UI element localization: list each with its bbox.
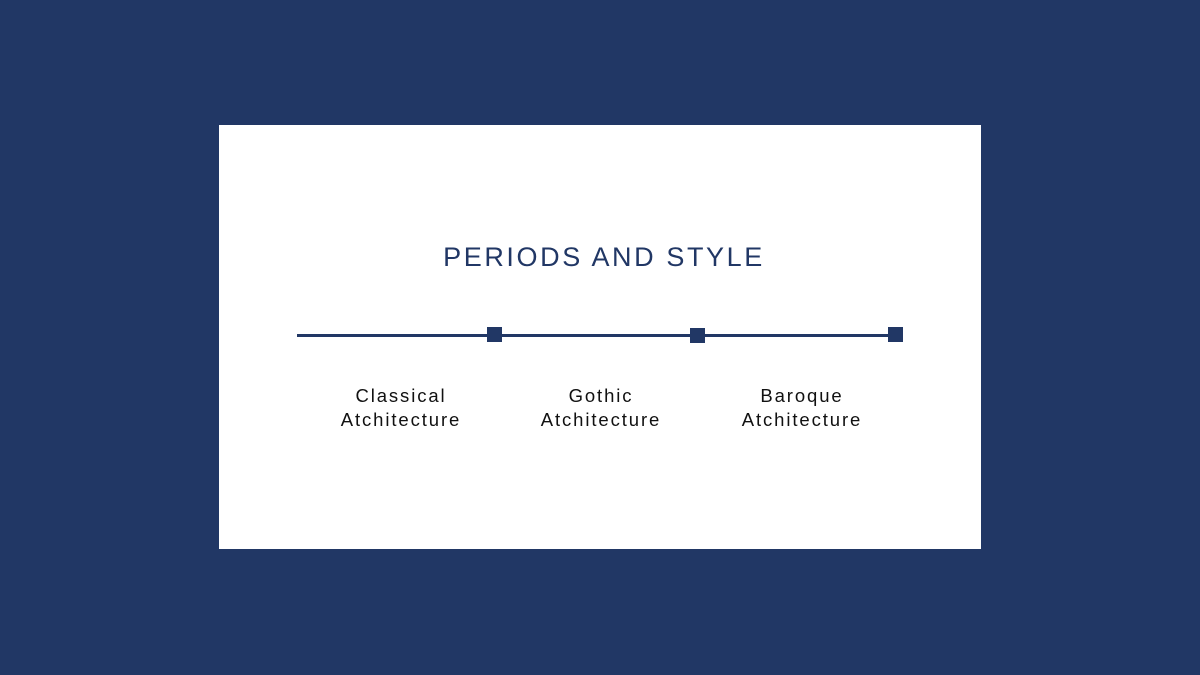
- label: classical: Classical: [355, 385, 447, 406]
- label: classical: [340, 385, 461, 430]
- label: gothic: Atchitecture: [541, 409, 661, 430]
- label: baroque: [742, 385, 862, 430]
- label: classical: Atchitecture: [341, 409, 461, 430]
- marker 3: [888, 327, 903, 342]
- label: baroque: Baroque: [760, 385, 844, 406]
- title: PERIODS AND STYLE: [443, 242, 765, 272]
- marker 1: [487, 327, 502, 342]
- label: baroque: Atchitecture: [742, 409, 862, 430]
- timeline: [297, 327, 903, 343]
- label: gothic: Gothic: [569, 385, 633, 406]
- marker 2: [690, 328, 705, 343]
- timeline line: [297, 334, 903, 337]
- panel: white card: [219, 125, 981, 549]
- label: gothic: [540, 385, 661, 430]
